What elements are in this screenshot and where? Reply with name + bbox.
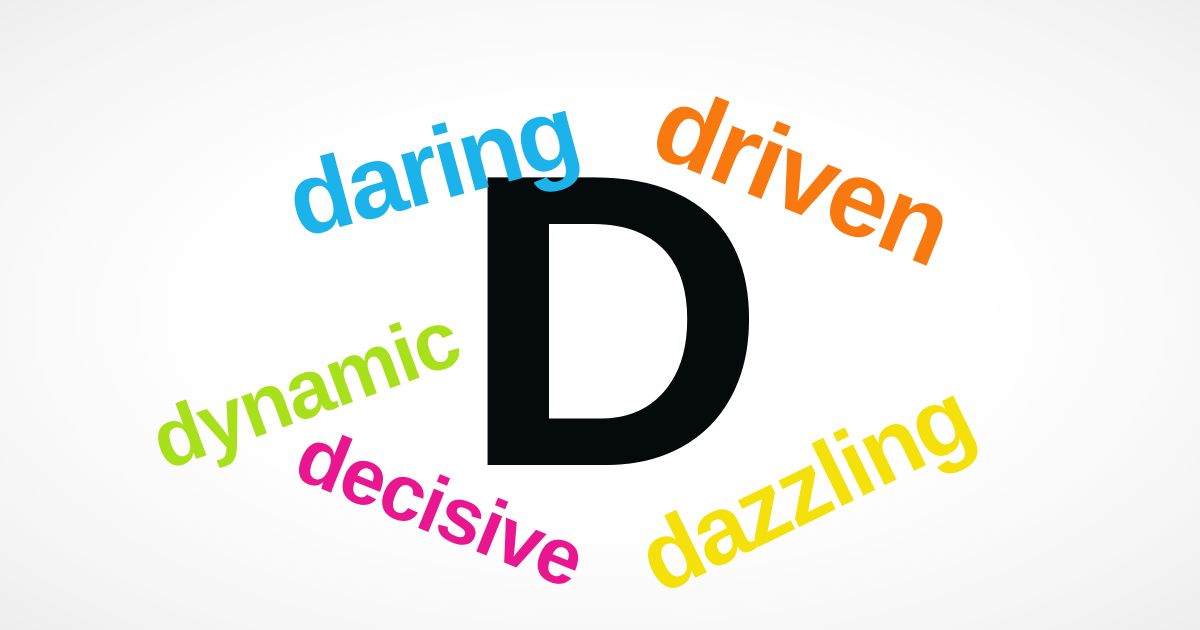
word: decisive: decisive (284, 410, 596, 604)
big letter D: D (459, 88, 767, 554)
word: dynamic: dynamic (140, 293, 471, 487)
word: dazzling: dazzling (622, 362, 988, 614)
word: driven: driven (637, 62, 967, 288)
word: daring: daring (275, 73, 589, 259)
